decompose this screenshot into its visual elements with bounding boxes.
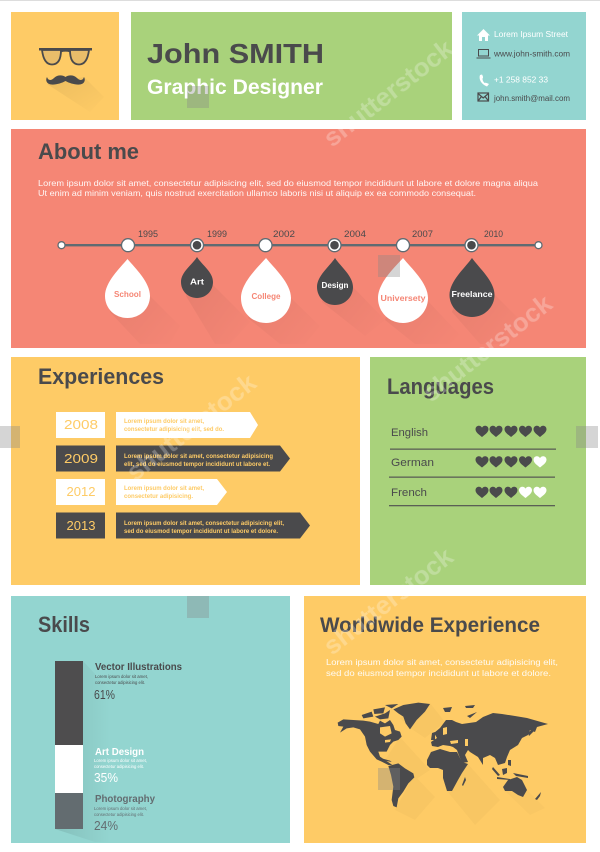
skills stacked bar bbox=[55, 661, 110, 842]
panel: languages bbox=[370, 357, 586, 585]
experience 2009: Lorem ipsum dolor sit amet, consectetur adipisicing bbox=[124, 454, 273, 460]
skill: photography: 24% bbox=[94, 818, 118, 833]
language: english: English bbox=[391, 427, 428, 439]
heading: worldwide experience: Worldwide Experience bbox=[320, 614, 540, 637]
africa bbox=[427, 749, 468, 791]
drop: college bbox=[241, 258, 291, 323]
heading: name: John SMITH bbox=[147, 38, 324, 69]
skill: photography: Photography bbox=[95, 794, 155, 805]
experience 2008: consectetur adipisicing elit, sed do. bbox=[124, 427, 224, 433]
skill: art design: Lorem ipsum dolor sit amet, bbox=[94, 758, 147, 763]
australia bbox=[503, 777, 527, 797]
timeline nodes bbox=[58, 239, 542, 252]
watermark: shutterstock bbox=[120, 33, 558, 661]
skill: vector illustrations bbox=[94, 662, 182, 702]
address: Lorem Ipsum Street bbox=[494, 30, 569, 39]
drop: freelance bbox=[450, 258, 494, 317]
islands bbox=[431, 705, 541, 800]
heading: about me: About me bbox=[38, 139, 139, 164]
experience 2009: 2009 bbox=[64, 452, 98, 466]
timeline years: 2007 bbox=[412, 229, 433, 239]
panel: avatar bbox=[11, 12, 119, 120]
heading: skills: Skills bbox=[38, 612, 90, 637]
timeline bbox=[58, 229, 542, 344]
drop: school: School bbox=[114, 289, 141, 299]
experience 2012: 2012 bbox=[66, 485, 96, 499]
phone number: +1 258 852 33 bbox=[494, 76, 549, 84]
language: english bbox=[390, 426, 556, 450]
watermark: shutterstock: shutterstock bbox=[317, 33, 459, 153]
experience 2013: Lorem ipsum dolor sit amet, consectetur adipisicing elit, bbox=[124, 521, 284, 527]
drop: art: Art bbox=[190, 276, 204, 286]
timeline years: 2002 bbox=[273, 229, 295, 239]
language: french bbox=[389, 487, 555, 506]
worldwide text: sed do eiusmod tempor incididunt ut labore et dolore. bbox=[326, 669, 551, 678]
worldwide text: Lorem ipsum dolor sit amet, consectetur adipisicing elit, bbox=[326, 658, 558, 667]
skill: photography: consectetur adipisicing elit. bbox=[94, 812, 144, 817]
watermark: shutterstock: shutterstock bbox=[120, 367, 262, 487]
drop: university bbox=[378, 258, 428, 323]
heading: experiences: Experiences bbox=[38, 364, 164, 389]
drop: freelance: Freelance bbox=[452, 289, 493, 299]
inland seas bbox=[443, 727, 468, 746]
drop: school bbox=[105, 259, 150, 318]
experience 2008: Lorem ipsum dolor sit amet, bbox=[124, 419, 204, 425]
panel: name header bbox=[131, 12, 452, 120]
panel: worldwide experience bbox=[304, 596, 586, 843]
skill: photography: Lorem ipsum dolor sit amet, bbox=[94, 806, 147, 811]
watermark: shutterstock: shutterstock bbox=[416, 288, 558, 408]
panel: contact bbox=[462, 12, 586, 120]
experience 2009: elit, sed do eiusmod tempor incididunt ut labore et. bbox=[124, 462, 270, 468]
timeline years: 2010 bbox=[484, 229, 503, 239]
skill: art design: consectetur adipisicing elit. bbox=[94, 764, 144, 769]
map shadows bbox=[385, 703, 545, 825]
timeline years: 1995 bbox=[138, 229, 158, 239]
icon: phone bbox=[480, 74, 489, 86]
language: german: German bbox=[391, 457, 434, 469]
about text: Lorem ipsum dolor sit amet, consectetur adipisicing elit, sed do eiusmod tempor incididunt ut labore et dolore magna aliqua bbox=[38, 178, 538, 188]
timeline years bbox=[138, 229, 503, 239]
icon: home bbox=[477, 29, 490, 41]
about text: Ut enim ad minim veniam, quis nostrud exercitation ullamco laboris nisi ut aliquip ex ea commodo consequat. bbox=[38, 188, 476, 198]
skill: vector illustrations: Lorem ipsum dolor sit amet, bbox=[95, 674, 148, 679]
experience 2013: sed do eiusmod tempor incididunt ut labore et dolore. bbox=[124, 529, 278, 535]
panel: about me bbox=[11, 129, 586, 348]
skill: art design bbox=[94, 747, 147, 785]
drop: art bbox=[181, 257, 213, 298]
world map bbox=[338, 703, 548, 825]
icon: glasses and moustache bbox=[39, 48, 104, 112]
drop: university: Universety bbox=[380, 293, 426, 303]
watermark: shutterstock: shutterstock bbox=[317, 541, 459, 661]
timeline years: 2004 bbox=[344, 229, 366, 239]
panel: skills bbox=[11, 596, 290, 843]
experience 2013: 2013 bbox=[66, 519, 96, 533]
drop: design bbox=[317, 258, 353, 305]
email: john.smith@mail.com bbox=[493, 94, 570, 103]
experience 2013 bbox=[56, 512, 310, 538]
drop: college: College bbox=[252, 291, 281, 301]
americas and greenland bbox=[338, 703, 430, 807]
timeline years: 1999 bbox=[207, 229, 227, 239]
drop shadows bbox=[110, 258, 520, 344]
icon: mail bbox=[478, 93, 488, 101]
website: www.john-smith.com bbox=[493, 50, 570, 58]
skill: vector illustrations: Vector Illustrations bbox=[95, 662, 182, 673]
skill: art design: 35% bbox=[94, 770, 118, 785]
experience 2008 bbox=[56, 412, 258, 438]
experience 2012 bbox=[56, 479, 227, 505]
drop: design: Design bbox=[322, 280, 348, 290]
skill: photography bbox=[94, 794, 155, 833]
skill: vector illustrations: consectetur adipisicing elit. bbox=[95, 680, 145, 685]
heading: job title: Graphic Designer bbox=[147, 76, 323, 99]
language: french: French bbox=[391, 487, 427, 499]
experience 2008: 2008 bbox=[64, 418, 98, 432]
heading: languages: Languages bbox=[387, 374, 494, 399]
experience 2009 bbox=[56, 446, 290, 472]
experience 2012: consectetur adipisicing. bbox=[124, 494, 193, 500]
skill: art design: Art Design bbox=[95, 747, 144, 758]
eurasia bbox=[431, 713, 548, 765]
experience 2012: Lorem ipsum dolor sit amet, bbox=[124, 486, 204, 492]
skill: vector illustrations: 61% bbox=[94, 687, 115, 702]
language: german bbox=[389, 456, 555, 478]
panel: experiences bbox=[11, 357, 360, 585]
icon: laptop bbox=[476, 49, 490, 58]
